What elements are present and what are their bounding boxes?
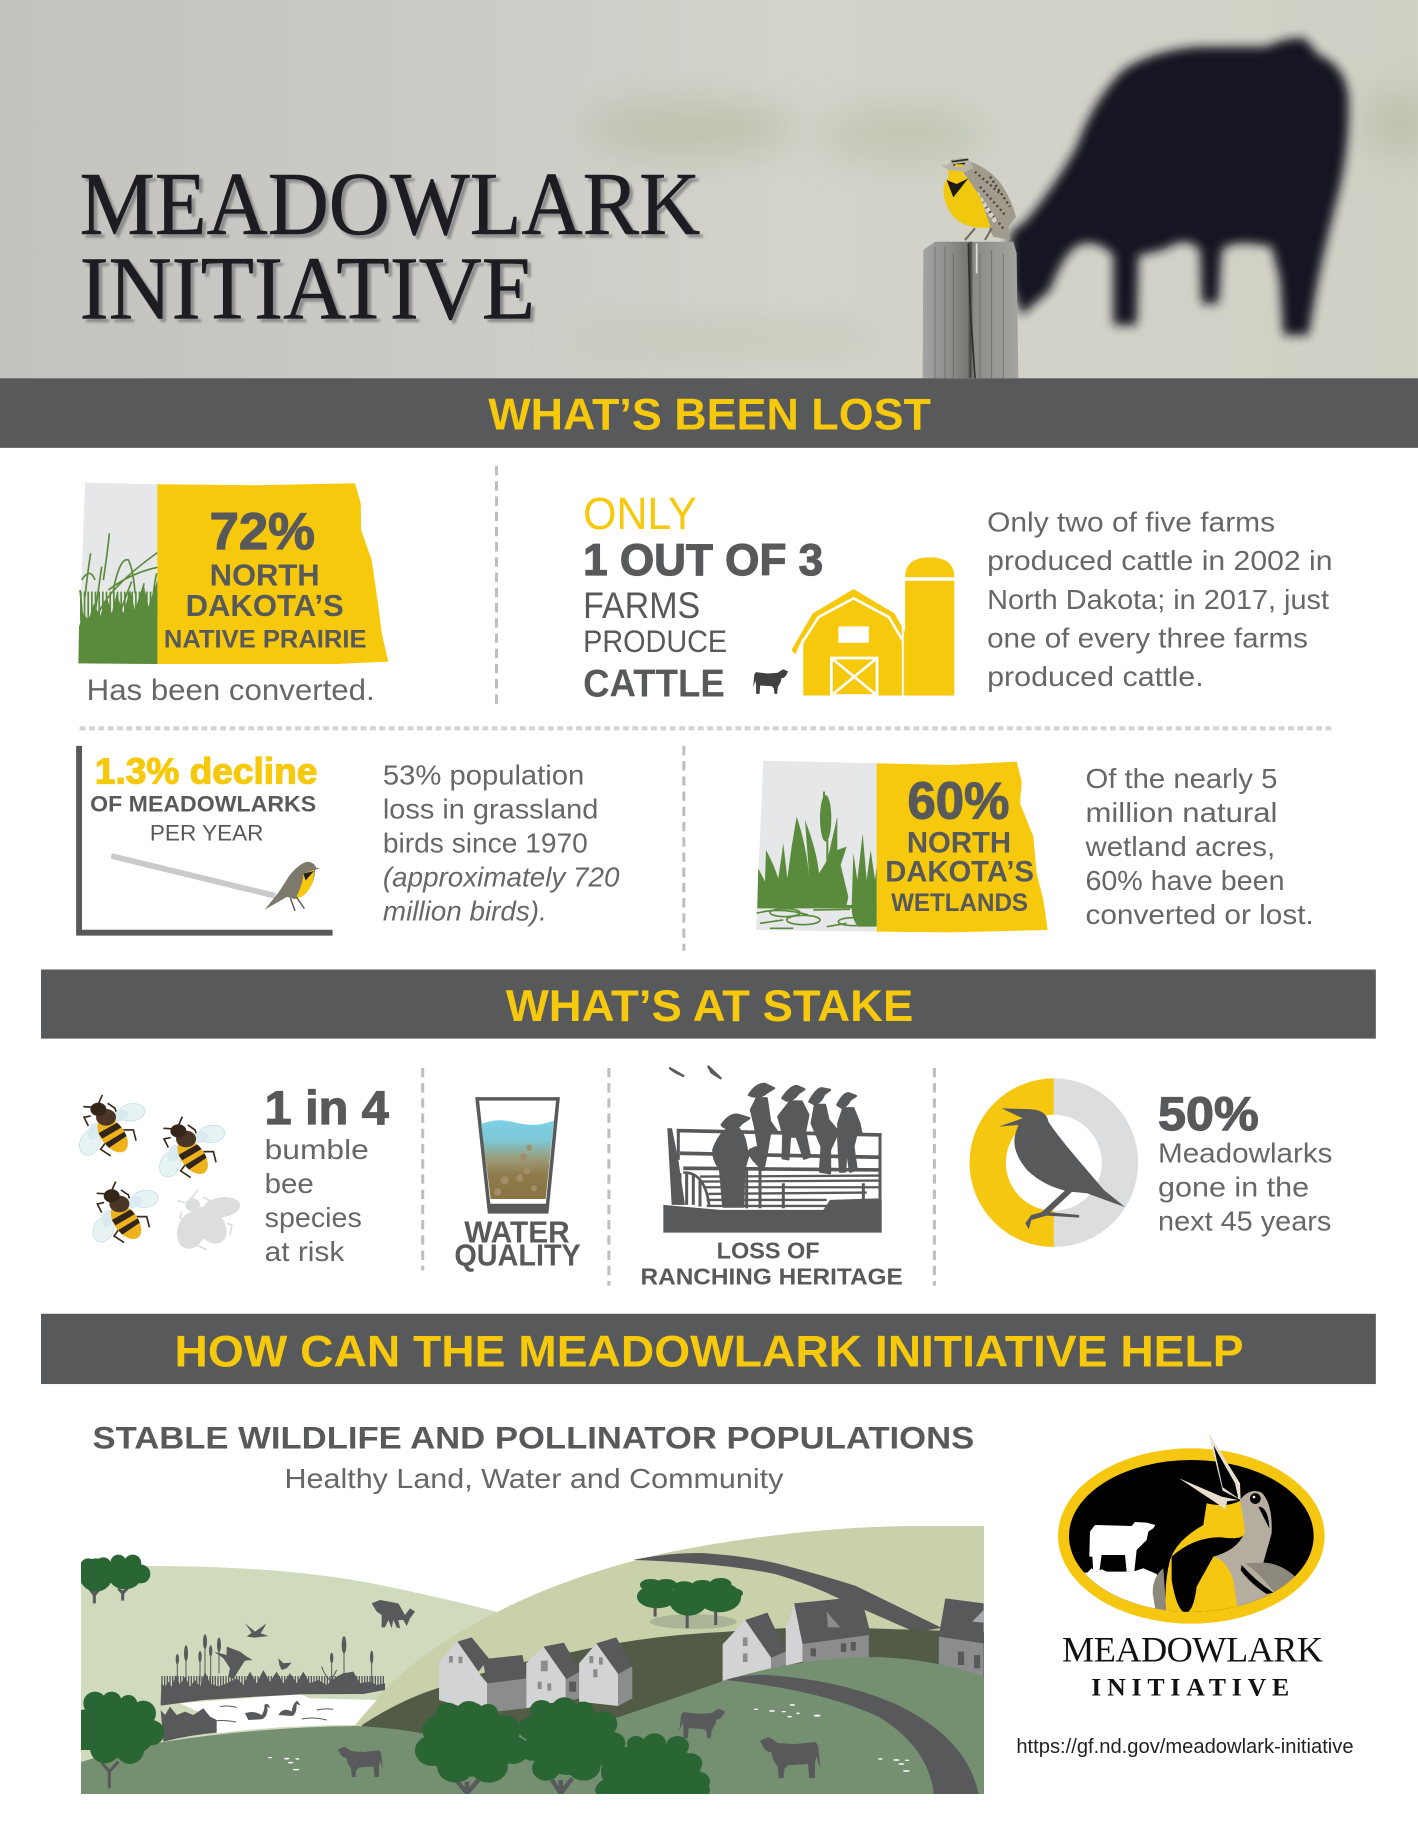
section banner: how can the initiative help: [41, 1314, 1376, 1384]
text block: wetland loss: 60% have been: [1085, 865, 1285, 896]
text block: grassland bird loss: birds since 1970: [383, 827, 588, 858]
stat text: next 45 years: [1158, 1206, 1331, 1237]
section banner: what's been lost: [0, 378, 1418, 448]
trees centre: [414, 1697, 710, 1794]
stat text: NORTH: [907, 827, 1011, 859]
text block: grassland bird loss: million birds).: [383, 895, 547, 926]
chart text: [90, 750, 317, 846]
stat text: DAKOTA’S: [186, 589, 344, 623]
cattle: [338, 1709, 821, 1778]
stat text: WETLANDS: [891, 890, 1028, 917]
text block: grassland bird loss: loss in grassland: [383, 793, 598, 824]
stat text: [1158, 1088, 1333, 1237]
text block: wetland loss: Of the nearly 5: [1085, 763, 1277, 794]
chart text: OF MEADOWLARKS: [90, 791, 316, 816]
section banner: what's at stake: WHAT’S AT STAKE: [506, 982, 913, 1031]
icon: three bees and one faded bee: [75, 1095, 242, 1253]
caption: Has been converted.: [87, 675, 375, 707]
label: [641, 1238, 903, 1289]
panel: 1.3% decline chart: [79, 746, 333, 933]
stat text: 60%: [907, 771, 1009, 829]
text block: farm cattle explanation: North Dakota; in 2017, just: [987, 584, 1329, 615]
pond with reeds and water birds: [161, 1600, 415, 1742]
text block: wetland loss: wetland acres,: [1084, 831, 1275, 862]
right hill: [355, 1526, 984, 1726]
label: QUALITY: [454, 1239, 581, 1273]
North Dakota map with cattails: [756, 761, 1048, 932]
stat text: bee: [265, 1168, 314, 1199]
stat text: gone in the: [1158, 1172, 1309, 1203]
header photo: blurred pasture with cow and meadowlark on fence post: [0, 0, 1418, 378]
label: LOSS OF: [717, 1238, 820, 1264]
North Dakota map with prairie grass: [78, 483, 388, 664]
logo wordmark: [1062, 1630, 1323, 1701]
text block: wetland loss: million natural: [1085, 797, 1277, 828]
trees left: [72, 1555, 164, 1788]
stat text: at risk: [265, 1236, 345, 1267]
title: INITIATIVE: [80, 238, 535, 338]
text block: wetland loss: [1084, 763, 1314, 930]
headline stack: 1 OUT OF 3: [583, 536, 823, 585]
decline line: [111, 856, 275, 896]
left hill: [81, 1566, 497, 1762]
headline stack: CATTLE: [583, 663, 725, 706]
chart axes: [79, 746, 333, 933]
stat text: DAKOTA’S: [885, 857, 1034, 889]
meadowlark on post: [942, 158, 1016, 240]
headline stack: ONLY: [583, 488, 697, 539]
stat text: 50%: [1158, 1088, 1259, 1140]
panel: 72% native prairie converted: [78, 483, 388, 707]
heading: stable populations: STABLE WILDLIFE AND POLLINATOR POPULATIONS: [93, 1419, 974, 1455]
panel: bumble bees at risk: [75, 1082, 389, 1267]
stat text: NATIVE PRAIRIE: [164, 627, 367, 654]
label: RANCHING HERITAGE: [641, 1263, 903, 1289]
logo wordmark: INITIATIVE: [1091, 1672, 1289, 1701]
logo wordmark: MEADOWLARK: [1062, 1630, 1323, 1670]
title: [80, 154, 700, 338]
headline stack: [583, 488, 823, 706]
blurred black cow: [1010, 38, 1349, 335]
headline stack: FARMS: [583, 584, 700, 626]
heading: stable populations: Healthy Land, Water and Community: [285, 1463, 783, 1494]
text block: farm cattle explanation: produced cattle in 2002 in: [987, 545, 1333, 576]
section banner: how can the initiative help: HOW CAN THE MEADOWLARK INITIATIVE HELP: [174, 1327, 1244, 1376]
road far: [633, 1553, 942, 1632]
fence post: [923, 242, 1018, 378]
far trees: [637, 1578, 743, 1629]
panel: 50% meadowlarks gone: [970, 1078, 1333, 1247]
panel: loss of ranching heritage: [641, 1067, 903, 1289]
label: [454, 1215, 581, 1273]
title: MEADOWLARK: [80, 154, 700, 254]
stat text: [265, 1082, 389, 1267]
foreground green hills: [81, 1657, 984, 1794]
chart text: PER YEAR: [150, 821, 263, 846]
text block: farm cattle explanation: Only two of five farms: [987, 507, 1275, 538]
stat text: 72%: [210, 502, 315, 560]
text block: farm cattle explanation: [987, 507, 1333, 692]
headline stack: PRODUCE: [583, 623, 727, 659]
stat text: [164, 502, 367, 654]
icon: barn and silo: [792, 557, 954, 696]
panel: 60% wetlands: [756, 761, 1048, 932]
icon: glass of muddy water: [477, 1099, 558, 1212]
icon: ranchers on fence silhouette: [663, 1067, 882, 1233]
road near: [725, 1675, 979, 1794]
section banner: what's been lost: WHAT’S BEEN LOST: [488, 391, 931, 440]
flowers: [268, 1704, 910, 1772]
illustration: healthy landscape with hills, homes, wildlife and cattle: [72, 1526, 984, 1810]
text block: grassland bird loss: 53% population: [383, 760, 584, 791]
stat text: bumble: [265, 1134, 369, 1165]
stat text: species: [265, 1202, 362, 1233]
text block: farm cattle explanation: one of every three farms: [987, 623, 1308, 654]
label: WATER: [464, 1215, 570, 1249]
text block: farm cattle explanation: produced cattle.: [987, 661, 1204, 692]
panel: water quality: [454, 1099, 581, 1273]
chart text: 1.3% decline: [95, 750, 317, 791]
logo emblem: [1058, 1432, 1325, 1624]
heading: stable populations: [93, 1419, 974, 1494]
text block: wetland loss: converted or lost.: [1085, 899, 1314, 930]
panel: only 1 out of 3 farms produce cattle: [583, 488, 954, 706]
section banner: what's at stake: [41, 970, 1376, 1039]
donut chart with meadowlark: [970, 1078, 1138, 1247]
stat text: 1 in 4: [265, 1082, 389, 1134]
website link: https://gf.nd.gov/meadowlark-initiative: [1016, 1736, 1354, 1758]
stat text: [885, 771, 1034, 917]
stat text: NORTH: [210, 558, 320, 592]
icon: meadowlark on decline line: [265, 862, 320, 911]
houses: [439, 1597, 984, 1712]
text block: grassland bird loss: [383, 760, 620, 926]
logo: meadowlark initiative: [1058, 1432, 1325, 1701]
text block: grassland bird loss: (approximately 720: [383, 861, 620, 892]
icon: small cow: [753, 669, 788, 694]
dark hill: [362, 1628, 984, 1734]
stat text: Meadowlarks: [1158, 1138, 1333, 1169]
